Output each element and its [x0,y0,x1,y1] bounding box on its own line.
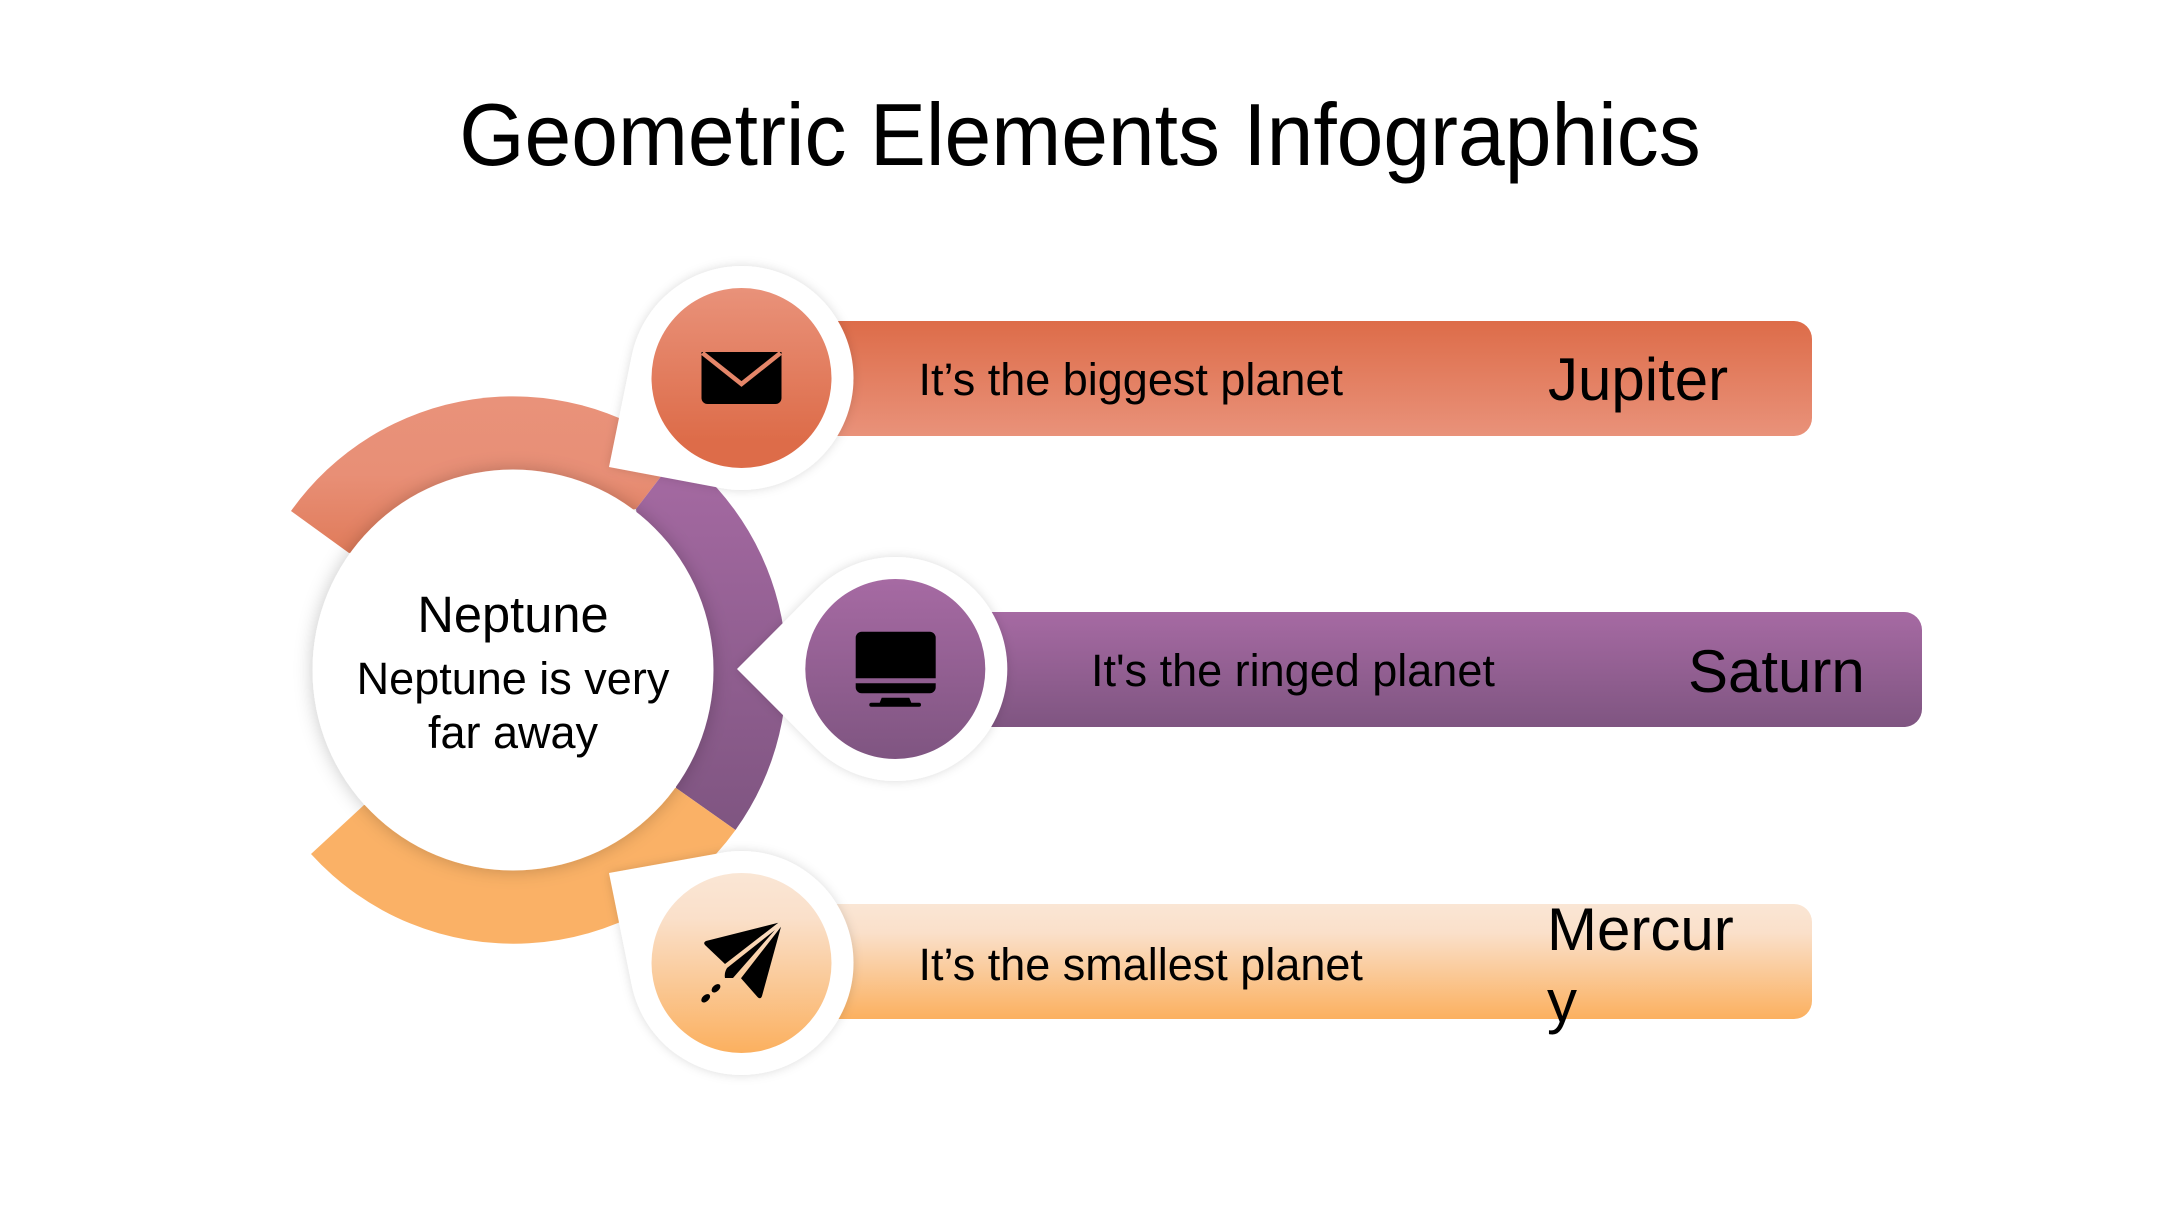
bar description: Mercury: It’s the smallest planet [918,939,1363,990]
pin: Jupiter with envelope [609,266,854,490]
centre description: far away [428,707,599,758]
title: Geometric Elements Infographics [459,86,1701,184]
ring: three arc segments around the centre circle [291,396,787,944]
centre heading: Neptune [417,586,609,643]
bar: Jupiter [800,321,1812,436]
ring segment: orange [311,788,736,944]
icon: monitor [856,632,936,707]
bar description: Jupiter: It’s the biggest planet [918,354,1343,405]
icon: envelope [702,352,782,404]
bar label: Saturn: Saturn [1688,638,1865,705]
bar: Mercury [800,896,1812,1035]
bar: Saturn [950,612,1922,727]
pin: Mercury with paper plane [609,851,854,1075]
centre description: Neptune is very [357,653,670,704]
ring segment: purple [636,453,787,830]
pin: Saturn with monitor [737,557,1007,781]
centre circle: Neptune [312,470,714,870]
bar label: Jupiter: Jupiter [1548,346,1728,413]
bar label: Mercury (wrapped): Mercur [1547,896,1734,963]
bar label: Mercury (wrapped): y [1547,968,1577,1035]
bar description: Saturn: It's the ringed planet [1091,645,1495,696]
icon: paper plane [700,923,781,1004]
ring segment: salmon [291,396,679,553]
